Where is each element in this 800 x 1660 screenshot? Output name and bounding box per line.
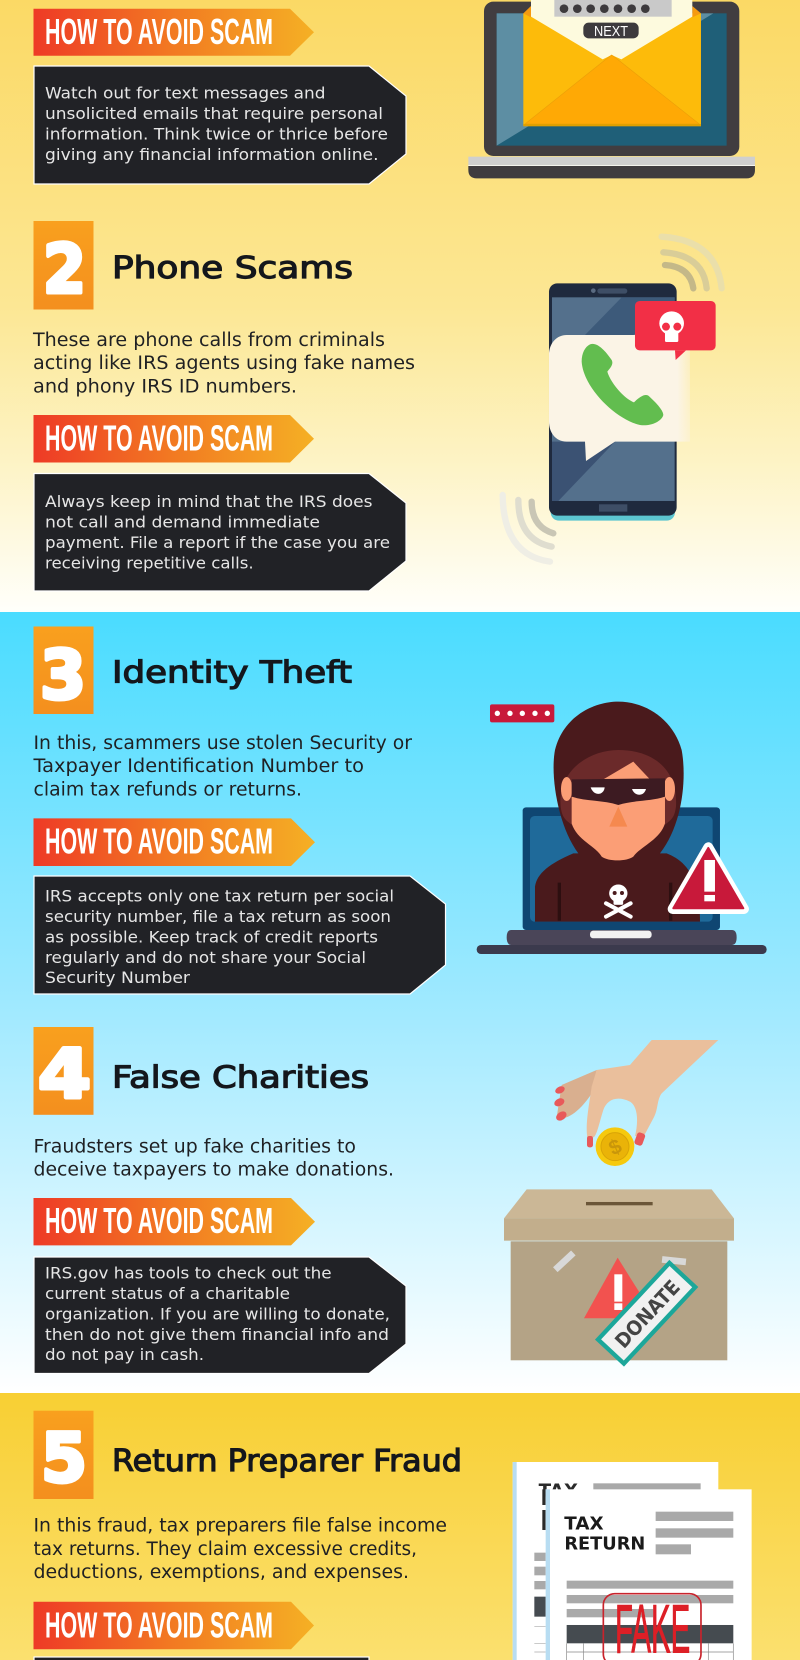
text: return preparer fraud description <box>34 1516 447 1583</box>
text: identity theft description: In this, scammers use stolen Security or <box>34 733 412 754</box>
icon: fake tax return papers <box>513 1462 752 1660</box>
callout: avoid identity theft advice: IRS accepts only one tax return per social <box>45 886 394 906</box>
callout: avoid email scam advice: giving any financial information online. <box>45 145 378 164</box>
banner: how to avoid scam 1: HOW TO AVOID SCAM <box>45 11 273 52</box>
panel: scam 1 continued <box>34 0 755 184</box>
callout: avoid identity theft advice: security number, file a tax return as soon <box>45 907 391 926</box>
banner: how to avoid scam 2 <box>34 415 314 462</box>
callout: avoid false charities advice: do not pay in cash. <box>45 1345 204 1364</box>
callout: avoid identity theft advice: Security Number <box>45 968 191 987</box>
text: return preparer fraud description: In this fraud, tax preparers file false income <box>34 1516 447 1537</box>
banner: how to avoid scam 1 <box>34 9 314 56</box>
callout: return preparer advice cut off <box>34 1657 369 1660</box>
callout: avoid phone scam advice <box>34 474 406 591</box>
icon: hand dropping coin into donation box: DONATE <box>610 1275 685 1353</box>
heading: phone scams: Phone Scams <box>112 251 353 286</box>
heading: identity theft: Identity Theft <box>112 656 352 690</box>
panel: scam 4 false charities <box>34 1027 734 1374</box>
heading: return preparer fraud: Return Preparer Fraud <box>112 1444 462 1479</box>
number badge 4: 4 <box>38 1036 91 1114</box>
text: return preparer fraud description: tax returns. They claim excessive credits, <box>34 1539 417 1560</box>
icon: laptop with envelope <box>468 0 755 178</box>
callout: avoid false charities advice: IRS.gov has tools to check out the <box>45 1264 332 1283</box>
callout: avoid false charities advice <box>34 1257 406 1374</box>
icon: fake tax return papers: TAX <box>564 1513 604 1534</box>
heading: false charities: False Charities <box>112 1060 369 1096</box>
banner: how to avoid scam 5: HOW TO AVOID SCAM <box>45 1604 273 1645</box>
callout: avoid phone scam advice: payment. File a report if the case you are <box>45 533 390 552</box>
text: phone scams description <box>32 330 415 398</box>
icon: laptop with envelope: NEXT <box>594 24 628 40</box>
callout: avoid false charities advice: organization. If you are willing to donate, <box>45 1304 390 1323</box>
icon: hooded hacker at laptop <box>477 702 767 954</box>
text: false charities description <box>34 1136 394 1180</box>
callout: avoid false charities advice: then do not give them financial info and <box>45 1325 389 1344</box>
text: identity theft description: Taxpayer Identification Number to <box>32 756 364 777</box>
number badge 5: 5 <box>41 1420 87 1498</box>
icon: hand dropping coin into donation box: $ <box>605 1134 626 1160</box>
number badge 3: 3 <box>40 636 86 716</box>
panel: scam 5 return preparer fraud <box>34 1411 752 1660</box>
callout: avoid email scam advice: unsolicited emails that require personal <box>45 104 383 123</box>
background: cyan section <box>0 612 800 1393</box>
banner: how to avoid scam 4: HOW TO AVOID SCAM <box>45 1200 273 1241</box>
number badge 2: 2 <box>43 230 86 310</box>
text: phone scams description: acting like IRS agents using fake names <box>33 353 415 374</box>
background: yellow section <box>0 0 800 612</box>
icon: ringing phone with skull alert <box>503 237 722 562</box>
callout: avoid identity theft advice <box>34 876 446 994</box>
callout: avoid phone scam advice: receiving repetitive calls. <box>45 554 254 572</box>
text: false charities description: Fraudsters set up fake charities to <box>34 1136 356 1158</box>
callout: avoid email scam advice: information. Think twice or thrice before <box>45 124 388 144</box>
banner: how to avoid scam 3 <box>34 818 315 866</box>
icon: fake tax return papers: RETURN <box>564 1534 645 1555</box>
banner: how to avoid scam 4 <box>34 1198 315 1245</box>
icon: hand dropping coin into donation box <box>504 1040 734 1364</box>
callout: avoid phone scam advice: not call and demand immediate <box>45 513 320 532</box>
panel: scam 3 identity theft <box>32 626 767 994</box>
callout: avoid false charities advice: current status of a charitable <box>45 1284 290 1303</box>
text: identity theft description: claim tax refunds or returns. <box>34 779 302 800</box>
panel: scam 2 phone scams <box>32 221 722 591</box>
banner: how to avoid scam 2: HOW TO AVOID SCAM <box>45 418 273 459</box>
text: phone scams description: and phony IRS ID numbers. <box>33 376 297 398</box>
callout: avoid identity theft advice: regularly and do not share your Social <box>45 948 366 967</box>
callout: avoid email scam advice <box>34 66 406 184</box>
text: false charities description: deceive taxpayers to make donations. <box>34 1160 394 1180</box>
text: return preparer fraud description: deductions, exemptions, and expenses. <box>34 1562 409 1583</box>
banner: how to avoid scam 5 <box>34 1602 314 1649</box>
banner: how to avoid scam 3: HOW TO AVOID SCAM <box>45 820 273 862</box>
callout: avoid phone scam advice: Always keep in mind that the IRS does <box>45 492 372 511</box>
callout: avoid identity theft advice: as possible. Keep track of credit reports <box>45 927 378 946</box>
text: phone scams description: These are phone calls from criminals <box>32 330 385 351</box>
callout: avoid email scam advice: Watch out for text messages and <box>45 84 326 102</box>
background: yellow lower section <box>0 1393 800 1660</box>
icon: fake tax return papers: TAX <box>539 1481 578 1502</box>
text: identity theft description <box>32 733 412 800</box>
